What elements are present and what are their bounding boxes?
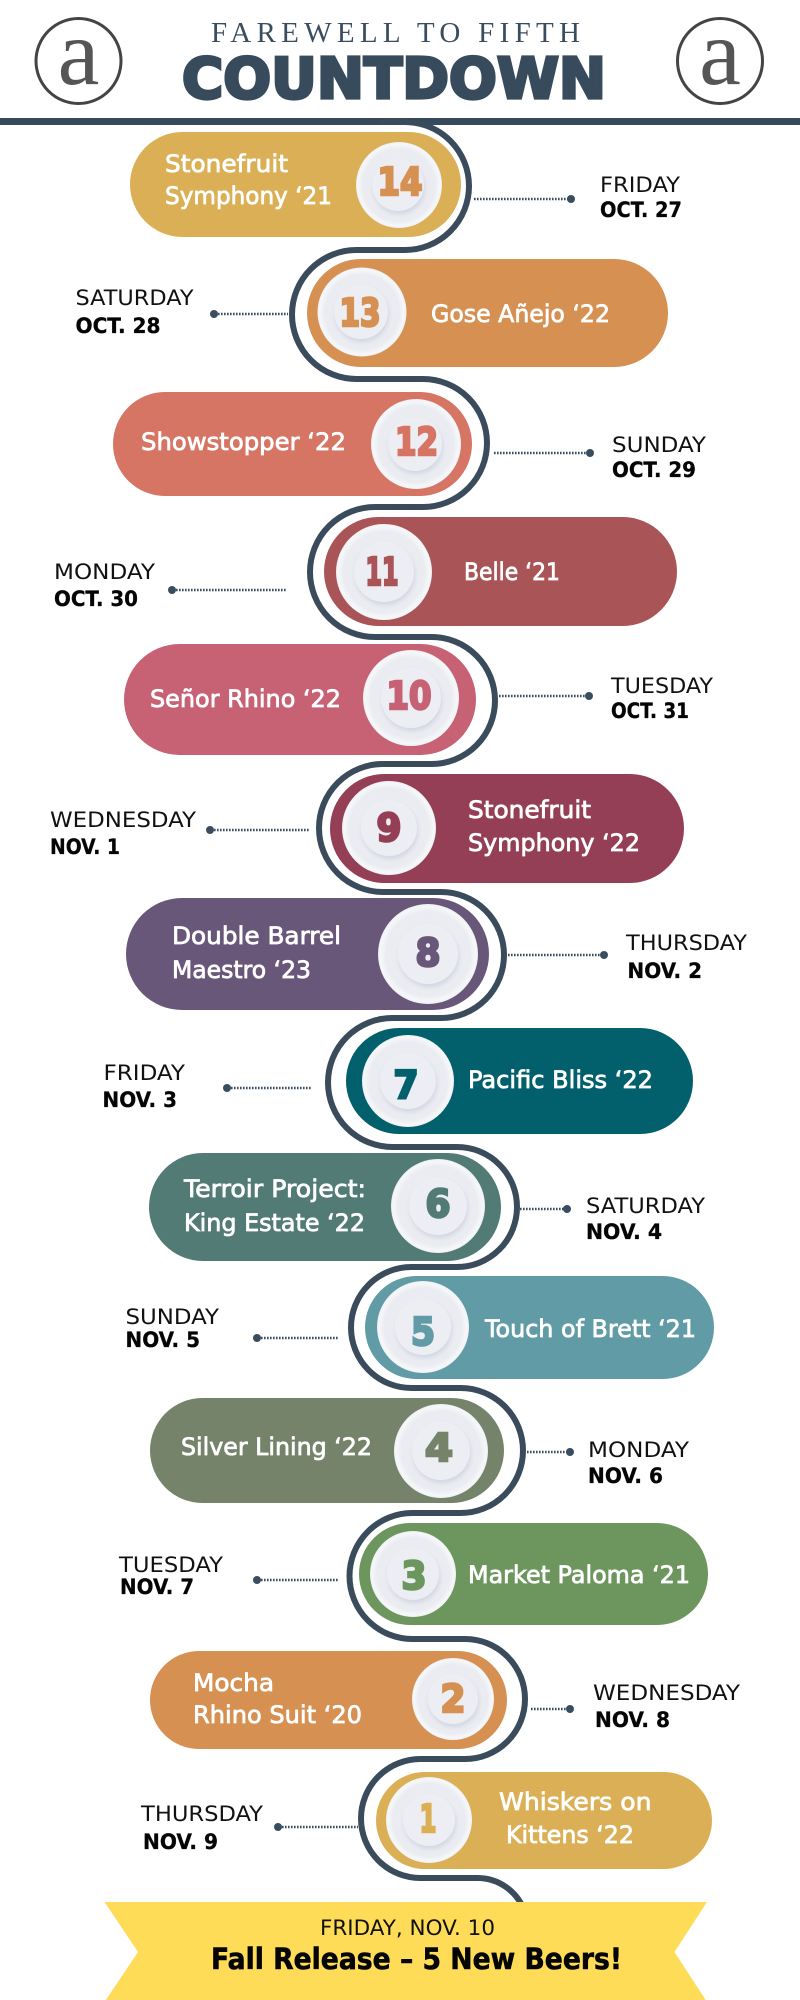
badge 5	[377, 1281, 469, 1373]
badge 9: 9	[376, 806, 402, 850]
stop 9	[50, 774, 684, 883]
date 11: OCT. 30	[54, 587, 138, 611]
stop 6	[149, 1153, 705, 1261]
date 14: OCT. 27	[600, 198, 682, 222]
badge 14	[356, 142, 442, 228]
date 1: THURSDAY	[140, 1802, 263, 1826]
date 8: THURSDAY	[625, 931, 747, 955]
date 12: SUNDAY	[612, 433, 706, 457]
badge 5: 5	[411, 1310, 435, 1354]
name 9: Stonefruit	[468, 796, 591, 824]
name 6	[183, 1175, 366, 1237]
badge 13: 13	[340, 291, 380, 335]
name 1	[499, 1788, 652, 1849]
name 9: Symphony ‘22	[468, 829, 640, 857]
connector 2	[531, 1705, 574, 1713]
stop 5	[126, 1276, 714, 1379]
connector 11	[168, 586, 286, 594]
banner ribbon	[104, 1902, 707, 2000]
badge 14: 14	[378, 160, 422, 204]
name 6: King Estate ‘22	[184, 1209, 365, 1237]
date 8	[625, 931, 747, 983]
name 1: Kittens ‘22	[506, 1821, 634, 1849]
date 14: FRIDAY	[600, 173, 680, 197]
name 13: Gose Añejo ‘22	[431, 300, 610, 328]
name 8: Double Barrel	[172, 922, 341, 950]
pill 5	[365, 1276, 714, 1379]
date 6	[586, 1194, 705, 1244]
pill 7	[346, 1028, 693, 1134]
date 5: SUNDAY	[126, 1305, 219, 1329]
date 4: NOV. 6	[588, 1464, 663, 1488]
name 4: Silver Lining ‘22	[181, 1433, 372, 1461]
badge 13	[318, 268, 406, 356]
date 3: NOV. 7	[120, 1575, 194, 1599]
stop 11	[54, 517, 677, 626]
date 6: SATURDAY	[586, 1194, 705, 1218]
badge 9	[342, 781, 436, 875]
pill 1	[376, 1772, 712, 1869]
date 11: MONDAY	[54, 560, 155, 584]
banner date: FRIDAY, NOV. 10	[320, 1916, 495, 1940]
badge 12	[371, 399, 461, 489]
badge 4: 4	[425, 1426, 453, 1470]
date 5	[126, 1305, 219, 1352]
stop 3	[118, 1523, 708, 1625]
date 6: NOV. 4	[586, 1220, 662, 1244]
stop 13	[76, 259, 668, 367]
pill 2	[150, 1651, 507, 1749]
connector 5	[253, 1334, 339, 1342]
connector 13	[210, 310, 288, 318]
name 14	[165, 150, 332, 210]
winding timeline path	[292, 122, 525, 1910]
date 13	[76, 286, 194, 338]
date 13: SATURDAY	[76, 286, 194, 310]
badge 7: 7	[394, 1063, 418, 1107]
name 14: Symphony ‘21	[165, 182, 332, 210]
logo right: a	[699, 1, 741, 105]
name 8	[172, 922, 341, 984]
name 8: Maestro ‘23	[172, 956, 311, 984]
badge 8	[378, 904, 478, 1004]
date 7: FRIDAY	[104, 1061, 185, 1085]
date 2: NOV. 8	[595, 1708, 670, 1732]
date 9: NOV. 1	[50, 835, 120, 859]
badge 8: 8	[416, 931, 440, 975]
date 7: NOV. 3	[102, 1088, 177, 1112]
date 8: NOV. 2	[628, 959, 702, 983]
banner	[104, 1902, 707, 2000]
connector 10	[499, 692, 593, 700]
badge 11: 11	[366, 550, 398, 594]
date 5: NOV. 5	[126, 1328, 200, 1352]
badge 3: 3	[402, 1554, 426, 1598]
date 12: OCT. 29	[612, 458, 696, 482]
badge 6	[391, 1159, 485, 1253]
connector 8	[508, 951, 608, 959]
logo left: a	[58, 1, 99, 105]
name 5: Touch of Brett ‘21	[484, 1315, 696, 1343]
badge 11	[336, 524, 432, 620]
pill 4	[150, 1398, 504, 1503]
pill 10	[124, 644, 476, 755]
pill 11	[324, 517, 677, 626]
subtitle: FAREWELL TO FIFTH	[211, 17, 580, 49]
date 7	[102, 1061, 185, 1112]
date 14	[600, 173, 682, 222]
date 10: TUESDAY	[610, 674, 713, 698]
logo right	[678, 1, 762, 105]
badge 10: 10	[386, 674, 432, 718]
connector 9	[206, 826, 309, 834]
date 12	[612, 433, 706, 482]
name 14: Stonefruit	[165, 150, 288, 178]
badge 3	[370, 1531, 456, 1617]
date 2: WEDNESDAY	[593, 1681, 740, 1705]
badge 4	[394, 1404, 488, 1498]
pill 13	[307, 259, 668, 367]
connector 6	[520, 1205, 571, 1213]
stop 14	[130, 132, 682, 237]
badge 12: 12	[395, 420, 438, 464]
pill 8	[126, 898, 489, 1010]
stop 1	[140, 1772, 712, 1869]
badge 6: 6	[426, 1182, 450, 1226]
name 1: Whiskers on	[499, 1788, 652, 1816]
pill 14	[130, 132, 461, 237]
name 6: Terroir Project:	[183, 1175, 366, 1203]
connector 4	[527, 1448, 574, 1456]
pill 9	[330, 774, 684, 883]
stop 2	[150, 1651, 740, 1749]
logo left	[36, 1, 121, 105]
date 3: TUESDAY	[118, 1553, 223, 1577]
stop 10	[124, 644, 713, 755]
pill 6	[149, 1153, 501, 1261]
date 11	[54, 560, 155, 611]
stop 8	[126, 898, 747, 1010]
title: COUNTDOWN	[182, 47, 606, 112]
date 3	[118, 1553, 223, 1599]
date 1: NOV. 9	[143, 1830, 218, 1854]
stop 7	[102, 1028, 693, 1134]
badge 2	[412, 1658, 494, 1740]
header rule	[0, 118, 800, 125]
name 3: Market Paloma ‘21	[468, 1561, 690, 1589]
name 12: Showstopper ‘22	[141, 428, 346, 456]
date 10: OCT. 31	[611, 699, 689, 723]
name 2: Mocha	[193, 1669, 274, 1697]
date 4	[588, 1438, 689, 1488]
date 9	[50, 808, 196, 859]
date 2	[593, 1681, 740, 1732]
badge 1	[386, 1777, 472, 1863]
date 4: MONDAY	[588, 1438, 689, 1462]
date 1	[140, 1802, 263, 1854]
name 2: Rhino Suit ‘20	[193, 1701, 362, 1729]
name 2	[193, 1669, 362, 1729]
pill 12	[113, 392, 472, 496]
name 9	[468, 796, 640, 857]
header	[0, 1, 800, 125]
stop 4	[150, 1398, 689, 1503]
name 7: Pacific Bliss ‘22	[468, 1066, 653, 1094]
badge 2: 2	[440, 1677, 466, 1721]
date 9: WEDNESDAY	[50, 808, 196, 832]
connector 1	[274, 1823, 358, 1831]
badge 7	[362, 1035, 454, 1127]
pill 3	[359, 1523, 708, 1625]
badge 1: 1	[420, 1797, 436, 1841]
banner headline: Fall Release – 5 New Beers!	[211, 1942, 622, 1976]
stop 12	[113, 392, 706, 496]
connector 14	[474, 195, 575, 203]
name 10: Señor Rhino ‘22	[150, 685, 341, 713]
date 13: OCT. 28	[76, 314, 160, 338]
badge 10	[363, 650, 459, 746]
name 11: Belle ‘21	[464, 558, 560, 586]
date 10	[610, 674, 713, 723]
connector 3	[253, 1576, 339, 1584]
connector 7	[223, 1084, 312, 1092]
connector 12	[494, 449, 594, 457]
